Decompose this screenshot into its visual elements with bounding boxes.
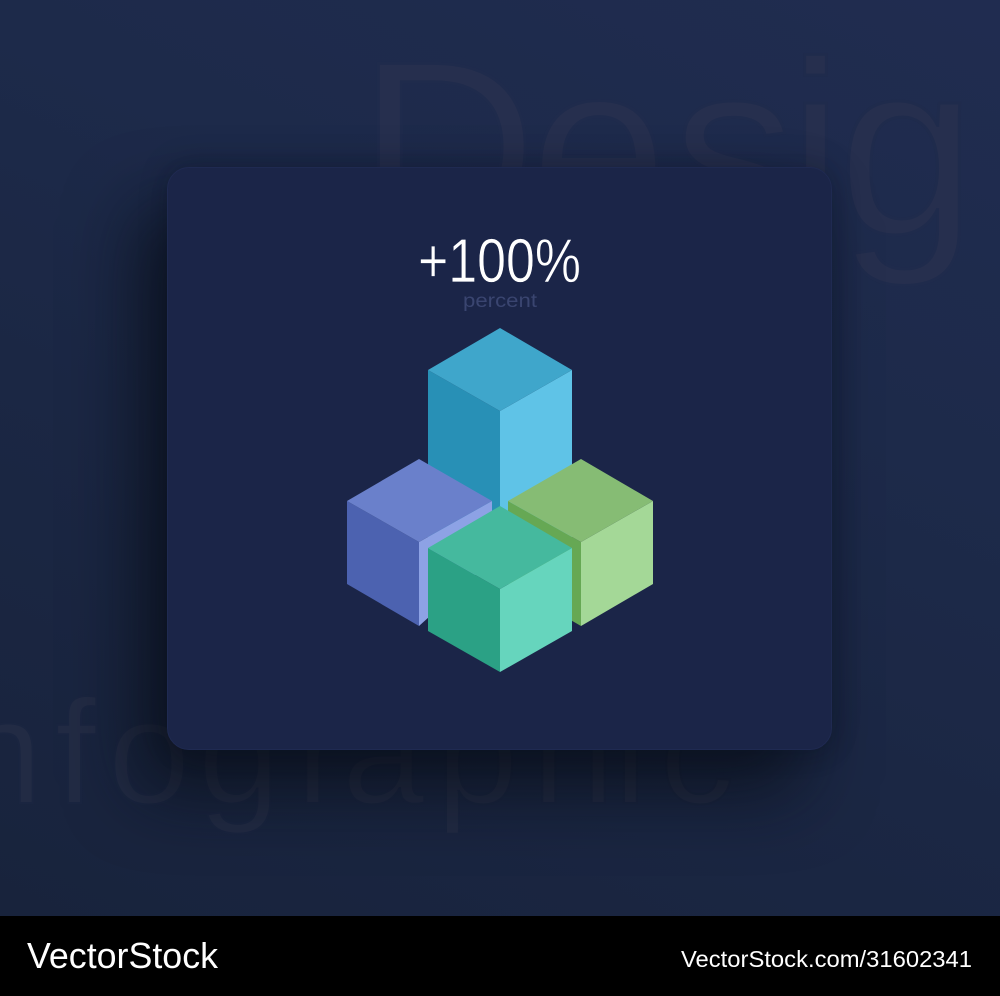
purple cube (347, 459, 492, 626)
footer bar (0, 916, 1000, 996)
label: percent: percent (463, 291, 538, 312)
blue tall cube (428, 328, 572, 540)
footer image id: VectorStock.com/31602341 (681, 946, 972, 972)
teal cube (428, 506, 572, 672)
ghost word: Design: Desig (358, 9, 976, 287)
value: +100%: +100% (418, 227, 581, 296)
green cube (508, 459, 653, 626)
footer logo text: VectorStock (27, 935, 219, 976)
card panel (167, 167, 832, 750)
